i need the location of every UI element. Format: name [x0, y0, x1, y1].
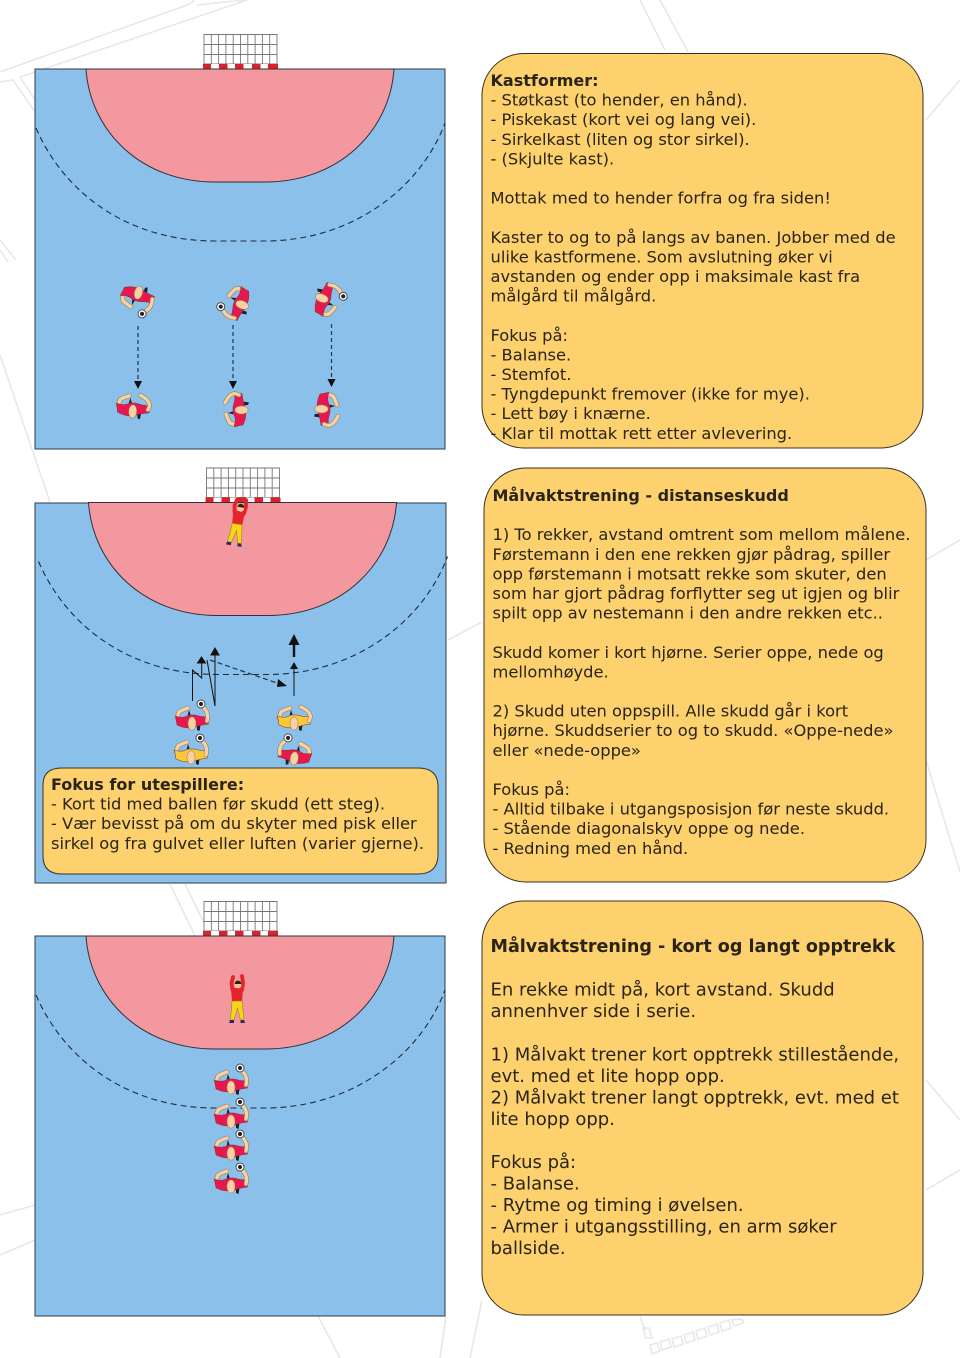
goalkeeper 2 — [226, 498, 249, 547]
text: Kastformer: - Balanse. — [490, 345, 571, 364]
text: distanseskudd: hjørne. Skuddserier to og to skudd. «Oppe-nede» — [492, 721, 894, 740]
court 1 — [35, 69, 445, 449]
goal 3 — [203, 902, 278, 936]
section 3: goalkeeper drill court — [35, 902, 445, 1316]
text: distanseskudd: opp førstemann i motsatt rekke som skuter, den — [492, 564, 887, 583]
callout: Fokus for utespillere: - Kort tid med ballen før skudd (ett steg). — [51, 795, 385, 814]
text: opptrekk: - Rytme og timing i øvelsen. — [490, 1195, 744, 1216]
text: Kastformer: - Støtkast (to hender, en hånd). — [490, 91, 748, 110]
player: line 3 — [214, 1130, 248, 1161]
text: opptrekk: evt. med et lite hopp opp. — [490, 1066, 725, 1087]
court 3 markings — [36, 936, 445, 1108]
player: line 4 — [214, 1163, 248, 1194]
text: distanseskudd: - Stående diagonalskyv oppe og nede. — [492, 819, 805, 838]
goal 2 — [206, 468, 280, 502]
text: opptrekk: Fokus på: — [490, 1152, 576, 1173]
text: distanseskudd: 1) To rekker, avstand omtrent som mellom målene. — [492, 525, 910, 544]
player: line 1 — [214, 1064, 248, 1095]
text: Kastformer: ulike kastformene. Som avslutning øker vi — [490, 247, 833, 266]
player: bottom left — [116, 394, 150, 420]
text: opptrekk: 2) Målvakt trener langt opptrekk, evt. med et — [490, 1088, 899, 1108]
section 1: throwing drill court — [35, 34, 445, 449]
text: opptrekk: En rekke midt på, kort avstand. Skudd — [490, 980, 835, 1000]
panel: Målvaktstrening kort og langt opptrekk — [482, 901, 923, 1315]
player: bottom right — [314, 392, 338, 426]
text: distanseskudd: Målvaktstrening - distanseskudd — [492, 486, 789, 505]
text: Kastformer: - Piskekast (kort vei og lang vei). — [490, 110, 756, 129]
text: Kastformer: - (Skjulte kast). — [490, 149, 614, 168]
text: distanseskudd: eller «nede-oppe» — [492, 741, 641, 760]
player: line 2 — [214, 1098, 248, 1129]
text: opptrekk — [490, 935, 899, 1259]
text: distanseskudd: spilt opp av nestemann i den andre rekken etc.. — [492, 604, 883, 623]
text: distanseskudd: - Redning med en hånd. — [492, 839, 688, 858]
callout: Fokus for utespillere — [43, 768, 438, 874]
arrow: right pass — [328, 324, 336, 387]
text: Kastformer — [490, 71, 896, 443]
text: Kastformer: Fokus på: — [490, 326, 568, 345]
arrow: middle pass — [229, 325, 237, 389]
text: Kastformer: - Sirkelkast (liten og stor sirkel). — [490, 130, 750, 149]
text: Kastformer: Mottak med to hender forfra og fra siden! — [490, 189, 831, 208]
text: distanseskudd: Førstemann i den ene rekken gjør pådrag, spiller — [492, 545, 890, 564]
player: top middle — [214, 281, 255, 323]
court 1 markings — [36, 69, 445, 241]
goal 1 — [203, 34, 278, 68]
text: opptrekk: lite hopp opp. — [490, 1109, 615, 1130]
text: Kastformer: målgård til målgård. — [490, 287, 656, 306]
text: distanseskudd: Skudd komer i kort hjørne. Serier oppe, nede og — [492, 643, 884, 662]
text: opptrekk: 1) Målvakt trener kort opptrekk stillestående, — [490, 1044, 899, 1066]
text: distanseskudd: 2) Skudd uten oppspill. Alle skudd går i kort — [492, 702, 848, 721]
text: distanseskudd: mellomhøyde. — [492, 662, 609, 681]
text: distanseskudd: Fokus på: — [492, 780, 570, 799]
arrow: zigzag runs — [192, 648, 219, 706]
text: Kastformer: - Stemfot. — [490, 365, 571, 384]
text: distanseskudd: - Alltid tilbake i utgangsposisjon før neste skudd. — [492, 800, 889, 819]
callout: Fokus for utespillere: - Vær bevisst på om du skyter med pisk eller — [51, 814, 417, 833]
section 2: shooting drill court — [35, 468, 448, 883]
arrow: left pass — [134, 326, 142, 389]
court 3 — [35, 936, 445, 1316]
player: right back — [277, 733, 314, 768]
text: Kastformer: - Lett bøy i knærne. — [490, 404, 651, 423]
court 2 markings — [38, 502, 448, 674]
player: bottom middle — [225, 394, 249, 426]
arrow: dashed pass — [210, 660, 287, 687]
player: right front — [278, 707, 310, 731]
goalkeeper 3 — [229, 976, 245, 1023]
arrow: run to shot — [290, 662, 298, 696]
court 2 — [35, 503, 446, 883]
text: opptrekk: Målvaktstrening - kort og langt opptrekk — [490, 935, 896, 957]
text: distanseskudd — [492, 486, 910, 858]
panel: Kastformer — [482, 54, 923, 448]
text: opptrekk: - Balanse. — [490, 1174, 580, 1194]
text: opptrekk: - Armer i utgangsstilling, en arm søker — [490, 1216, 837, 1238]
text: distanseskudd: som har gjort pådrag forflytter seg ut igjen og blir — [492, 584, 900, 603]
text: Kastformer: Kaster to og to på langs av banen. Jobber med de — [490, 228, 896, 247]
text: Kastformer: - Tyngdepunkt fremover (ikke for mye). — [490, 385, 810, 404]
player: top right — [309, 280, 350, 322]
player: top left — [116, 281, 156, 320]
text: opptrekk: annenhver side i serie. — [490, 1001, 696, 1022]
callout: Fokus for utespillere: Fokus for utespillere: — [51, 775, 244, 794]
text: Kastformer: Kastformer: — [490, 71, 599, 90]
player: left back — [174, 734, 208, 765]
panel: Målvaktstrening distanseskudd — [484, 468, 926, 882]
player: left front — [176, 700, 208, 731]
arrow: shot — [288, 634, 300, 657]
text: Kastformer: avstanden og ender opp i maksimale kast fra — [490, 267, 860, 286]
text: Kastformer: - Klar til mottak rett etter avlevering. — [490, 424, 792, 443]
callout: Fokus for utespillere: sirkel og fra gulvet eller luften (varier gjerne). — [51, 834, 424, 853]
text: opptrekk: ballside. — [490, 1238, 566, 1259]
